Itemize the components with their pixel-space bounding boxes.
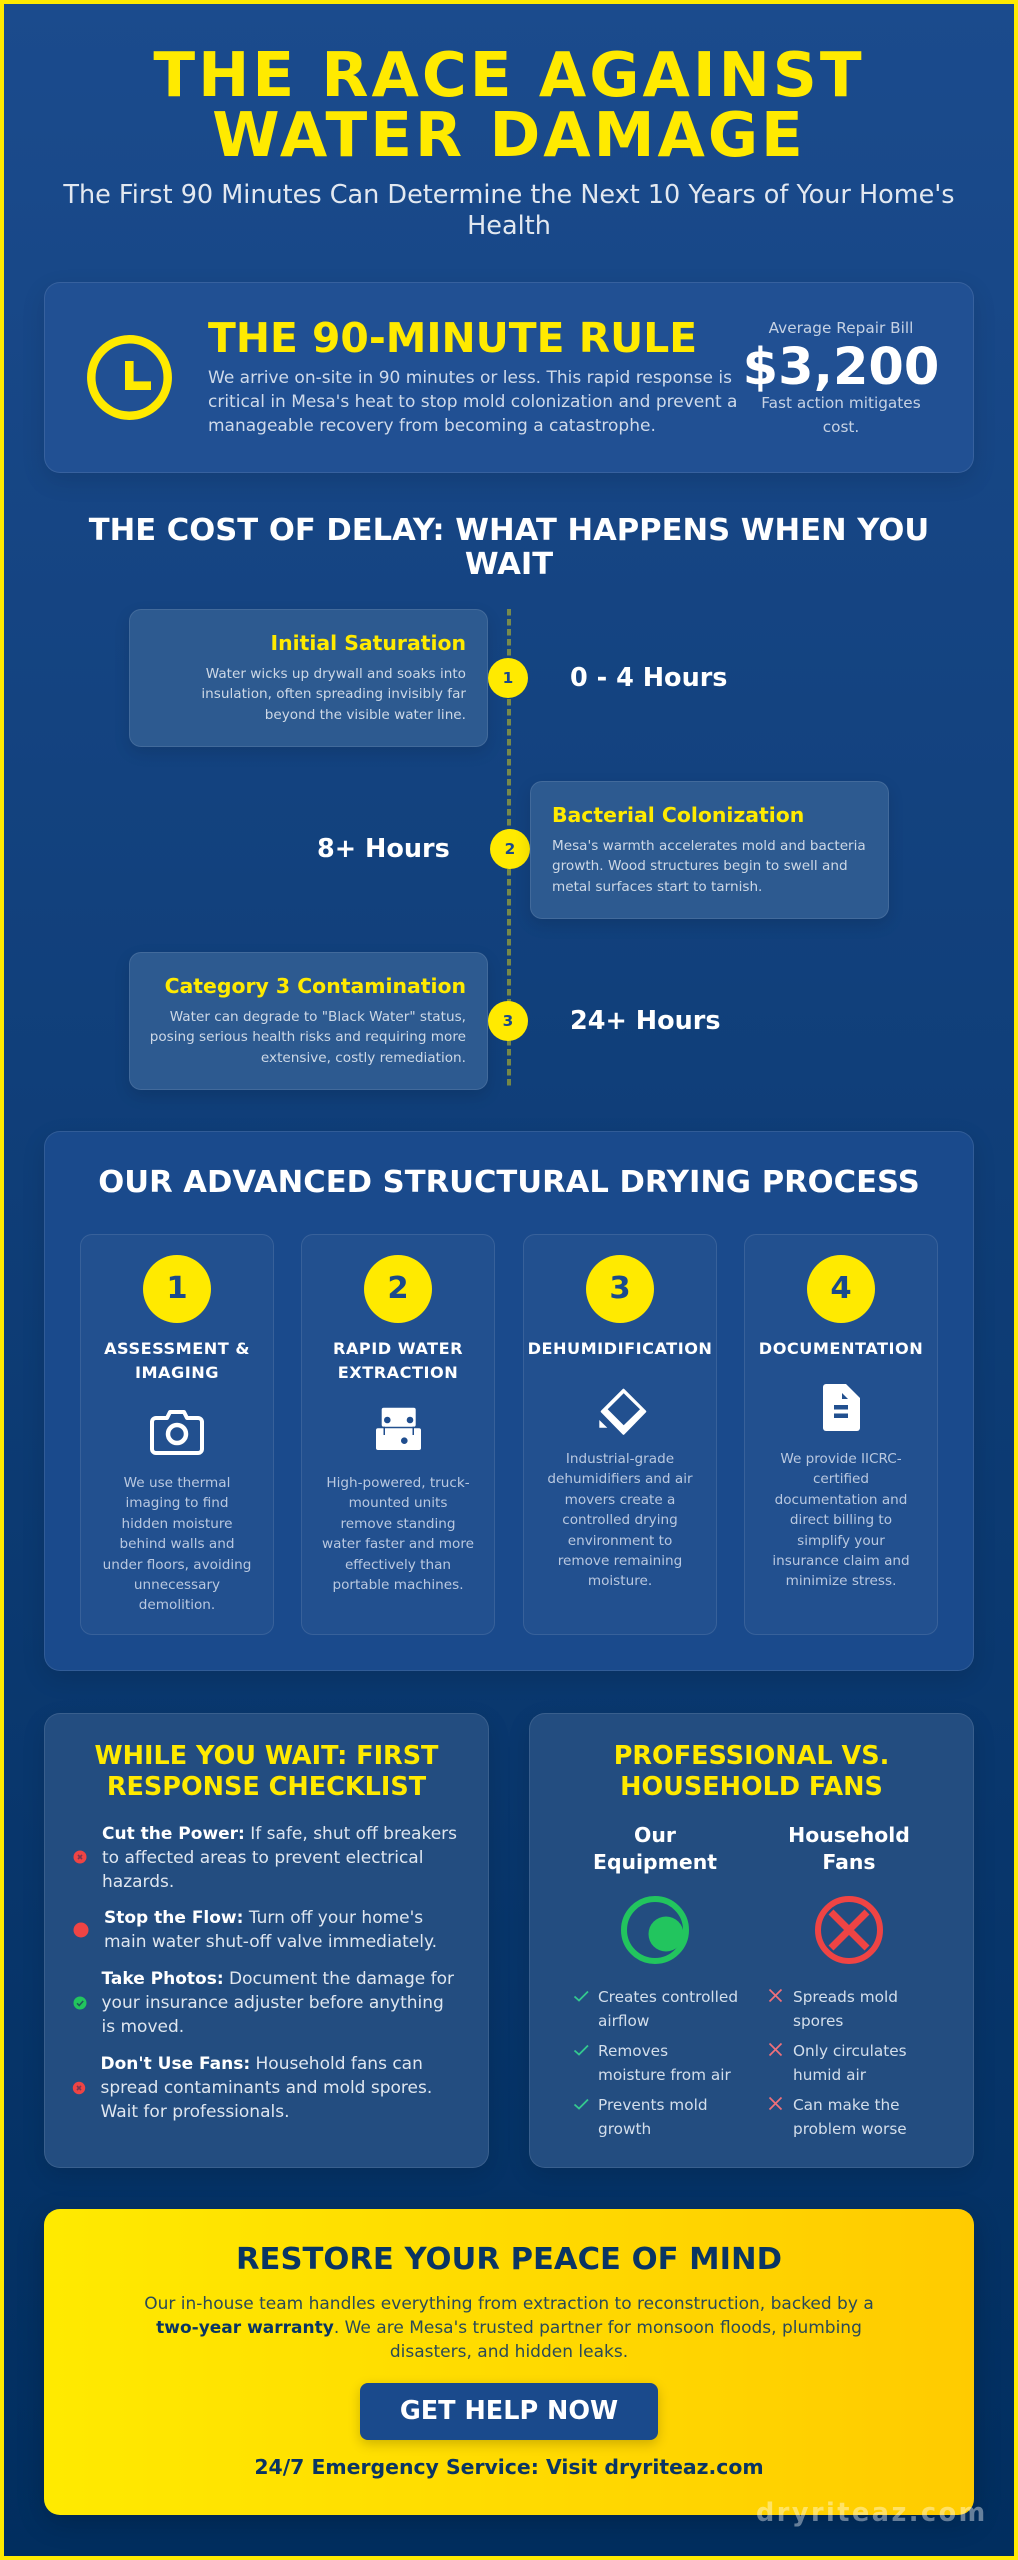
marker 1 (488, 658, 528, 698)
icon: clock (87, 335, 172, 420)
number 2: 2 (387, 1271, 409, 1306)
checklist item 1: to affected areas to prevent electrical (102, 1848, 423, 1868)
checklist item 3: is moved. (102, 2017, 184, 2037)
heading: structural drying process: OUR ADVANCED STRUCTURAL DRYING PROCESS (98, 1165, 920, 1200)
icon: equipment good (621, 1896, 689, 1964)
step 1 text: behind walls and (120, 1536, 234, 1552)
column heading: household fans: Household (788, 1823, 910, 1847)
marker 2: 2 (505, 840, 515, 858)
column heading: household fans: Fans (822, 1850, 876, 1874)
icon: document (823, 1384, 860, 1431)
button: get help now (360, 2383, 658, 2440)
icon: extraction unit (376, 1408, 421, 1450)
panel: bacterial colonization (530, 781, 889, 919)
benefit 1: airflow (598, 2012, 649, 2030)
heading: checklist: WHILE YOU WAIT: FIRST (95, 1741, 438, 1771)
step 4 text (772, 1451, 910, 1589)
panel: step 2 (301, 1234, 495, 1635)
step 4 text: insurance claim and (772, 1553, 910, 1569)
card text: Mesa's warmth accelerates mold and bacteria (552, 838, 866, 854)
icon: drying diamond (599, 1388, 646, 1435)
step 1 text: unnecessary (134, 1577, 220, 1593)
button: get help now: GET HELP NOW (400, 2396, 618, 2426)
step 1 title: ASSESSMENT & (104, 1339, 250, 1358)
panel: step 3 (523, 1234, 717, 1635)
step 2 text: effectively than (345, 1557, 451, 1573)
card text: metal surfaces start to tarnish. (552, 879, 762, 895)
list: equipment benefits (574, 1988, 738, 2138)
subtitle (63, 180, 955, 241)
number 4 (807, 1255, 875, 1323)
step 1 text: We use thermal (124, 1475, 230, 1491)
drawback 3 (769, 2093, 949, 2141)
drawback 1: spores (793, 2012, 843, 2030)
step 3 text: controlled drying (562, 1512, 678, 1528)
text: 90-minute rule description: We arrive on-site in 90 minutes or less. This rapid response is (208, 368, 732, 388)
drawback 2: Only circulates (793, 2042, 907, 2060)
step 1 text (103, 1475, 251, 1613)
stat: average repair bill: $3,200 (743, 338, 939, 397)
drawback 3: Can make the (793, 2096, 900, 2114)
heading: cost of delay: WAIT (465, 547, 553, 582)
drawback 3: problem worse (793, 2120, 907, 2138)
step 3 text: Industrial-grade (566, 1451, 674, 1467)
card text: growth. Wood structures begin to swell and (552, 858, 848, 874)
step 1 title (104, 1339, 250, 1382)
card text (150, 1009, 466, 1066)
icon: camera (150, 1410, 204, 1455)
marker 2 (490, 829, 530, 869)
checklist item 2: Stop the Flow: Turn off your home's (104, 1908, 423, 1928)
stat: average repair bill (743, 319, 939, 436)
card text: beyond the visible water line. (265, 707, 466, 723)
stat: average repair bill: Fast action mitigates (761, 394, 921, 412)
checklist item 4 (100, 2054, 432, 2122)
step 3 text: movers create a (565, 1492, 675, 1508)
step 3 text (547, 1451, 693, 1589)
stat: average repair bill: cost. (823, 418, 859, 436)
step 2 title: RAPID WATER (333, 1339, 463, 1358)
panel: initial saturation (129, 609, 488, 747)
number 4: 4 (830, 1271, 852, 1306)
card heading: Bacterial Colonization (552, 803, 804, 827)
step 2 text: mounted units (349, 1495, 447, 1511)
column heading: our equipment (593, 1823, 717, 1874)
number 3 (586, 1255, 654, 1323)
step 3 text: moisture. (588, 1573, 652, 1589)
panel: call to action (44, 2209, 974, 2515)
benefit 3: Prevents mold (598, 2096, 708, 2114)
drawback 2: humid air (793, 2066, 866, 2084)
checklist item 1 (102, 1824, 457, 1892)
step 4 text: We provide IICRC- (780, 1451, 902, 1467)
step 3 text: remove remaining (558, 1553, 682, 1569)
checklist item 3: Take Photos: Document the damage for (102, 1969, 454, 1989)
panel: category 3 contamination (129, 952, 488, 1090)
step 2 text: water faster and more (322, 1536, 474, 1552)
panel: first response checklist (44, 1713, 489, 2168)
title: THE RACE AGAINST (153, 40, 865, 111)
step 4 text: certified (813, 1471, 869, 1487)
step 1 title: IMAGING (135, 1362, 219, 1382)
step 1 text: hidden moisture (122, 1516, 232, 1532)
checklist item 1: hazards. (102, 1872, 174, 1892)
benefit 2: Removes (598, 2042, 668, 2060)
text: 90-minute rule description (208, 368, 737, 436)
step 1 text: demolition. (139, 1597, 215, 1613)
card text: Water wicks up drywall and soaks into (206, 666, 466, 682)
title (153, 40, 865, 171)
step 3 title: DEHUMIDIFICATION (528, 1339, 712, 1358)
benefit 2 (574, 2042, 731, 2084)
column heading: household fans (788, 1823, 910, 1874)
card heading: Category 3 Contamination (165, 974, 466, 998)
number 3: 3 (609, 1271, 631, 1306)
title: WATER DAMAGE (212, 100, 806, 171)
column heading: our equipment: Equipment (593, 1850, 717, 1874)
checklist item 3: your insurance adjuster before anything (102, 1993, 444, 2013)
time label 0-4 hours: 0 - 4 Hours (570, 663, 727, 693)
text: cta description: disasters, and hidden leaks. (390, 2342, 628, 2362)
icon: stop (74, 1922, 88, 1938)
icon: fans bad (815, 1896, 883, 1964)
panel: step 1 (80, 1234, 274, 1635)
panel: structural drying process (44, 1131, 974, 1671)
panel: professional vs household fans (529, 1713, 974, 2168)
checklist item 4: spread contaminants and mold spores. (100, 2078, 432, 2098)
card text: Water can degrade to "Black Water" status, (170, 1009, 466, 1025)
marker 3: 3 (503, 1012, 513, 1030)
card text: insulation, often spreading invisibly far (201, 686, 466, 702)
number 2 (364, 1255, 432, 1323)
column heading: our equipment: Our (634, 1823, 676, 1847)
time label 8+ hours: 8+ Hours (317, 834, 450, 864)
checklist item 2 (104, 1908, 437, 1952)
icon: check (74, 1996, 86, 2010)
panel: 90-minute rule (44, 282, 974, 473)
step 2 text: portable machines. (332, 1577, 464, 1593)
step 4 text: direct billing to (790, 1512, 892, 1528)
stat: average repair bill: Average Repair Bill (769, 319, 913, 337)
subtitle: Health (467, 211, 551, 241)
heading: cost of delay (88, 513, 929, 582)
heading: checklist: RESPONSE CHECKLIST (107, 1772, 426, 1802)
step 2 text: High-powered, truck- (326, 1475, 470, 1491)
step 4 text: documentation and (775, 1492, 907, 1508)
text: 90-minute rule description: manageable recovery from becoming a catastrophe. (208, 416, 656, 436)
step 4 text: simplify your (797, 1533, 885, 1549)
text: cta description: Our in-house team handles everything from extraction to reconstruction, backed by a (144, 2294, 874, 2314)
drawback 2 (769, 2042, 907, 2084)
text: cta description (0, 2292, 1018, 2364)
card text: posing serious health risks and requiring more (150, 1029, 466, 1045)
watermark: dryriteaz.com (756, 2498, 988, 2528)
subtitle: The First 90 Minutes Can Determine the Next 10 Years of Your Home's (63, 180, 955, 210)
heading: checklist (95, 1741, 438, 1802)
step 1 text: under floors, avoiding (103, 1557, 251, 1573)
checklist item 4: Don't Use Fans: Household fans can (100, 2054, 423, 2074)
icon: no fans (72, 2082, 86, 2094)
heading: restore your peace of mind: RESTORE YOUR PEACE OF MIND (236, 2242, 782, 2277)
marker 3 (488, 1001, 528, 1041)
card text: extensive, costly remediation. (261, 1050, 466, 1066)
benefit 3: growth (598, 2120, 651, 2138)
drawback 1: Spreads mold (793, 1988, 898, 2006)
step 3 text: dehumidifiers and air (547, 1471, 693, 1487)
heading: professional vs household (614, 1741, 889, 1802)
number 1: 1 (166, 1271, 188, 1306)
heading: professional vs household: PROFESSIONAL VS. (614, 1741, 889, 1771)
number 1 (143, 1255, 211, 1323)
icon: no power (74, 1850, 86, 1864)
step 2 title (333, 1339, 463, 1382)
step 4 title: DOCUMENTATION (759, 1339, 923, 1358)
heading: cost of delay: THE COST OF DELAY: WHAT HAPPENS WHEN YOU (89, 513, 929, 548)
timeline line (507, 609, 511, 1089)
step 2 title: EXTRACTION (338, 1362, 458, 1382)
panel: step 4 (744, 1234, 938, 1635)
benefit 1: Creates controlled (598, 1988, 738, 2006)
step 4 text: minimize stress. (786, 1573, 896, 1589)
step 2 text (322, 1475, 474, 1593)
checklist item 2: main water shut-off valve immediately. (104, 1932, 437, 1952)
list: household drawbacks (769, 1988, 907, 2138)
card text (201, 666, 466, 723)
marker 1: 1 (503, 669, 513, 687)
time label 24+ hours: 24+ Hours (570, 1006, 720, 1036)
step 2 text: remove standing (341, 1516, 455, 1532)
benefit 1 (574, 1988, 738, 2030)
checklist item 4: Wait for professionals. (100, 2102, 289, 2122)
text: emergency service: 24/7 Emergency Service: Visit dryriteaz.com (254, 2455, 764, 2479)
benefit 2: moisture from air (598, 2066, 731, 2084)
heading: professional vs household: HOUSEHOLD FANS (620, 1772, 883, 1802)
heading: 90-minute rule: THE 90-MINUTE RULE (208, 314, 697, 362)
text: 90-minute rule description: critical in Mesa's heat to stop mold colonization and prevent a (208, 392, 737, 412)
card text (552, 838, 866, 895)
step 1 text: imaging to find (125, 1495, 229, 1511)
checklist item 3 (102, 1969, 454, 2037)
benefit 3 (574, 2096, 708, 2138)
step 3 text: environment to (568, 1533, 672, 1549)
checklist item 1: Cut the Power: If safe, shut off breakers (102, 1824, 457, 1844)
drawback 1 (769, 1988, 898, 2030)
text: cta description: two-year warranty. We are Mesa's trusted partner for monsoon floods, plumbing (156, 2318, 862, 2338)
card heading: Initial Saturation (271, 631, 466, 655)
